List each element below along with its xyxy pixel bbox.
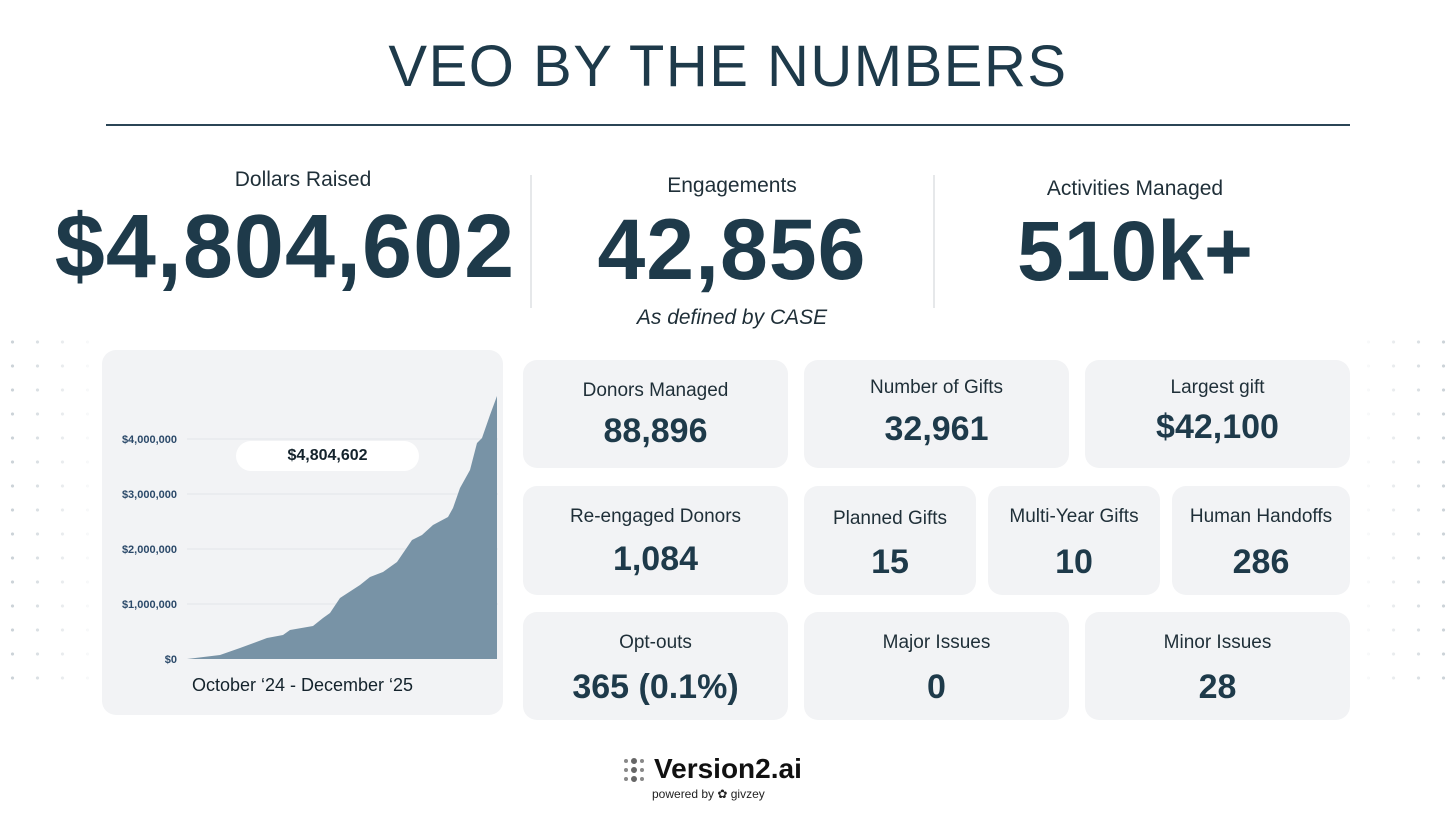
stat: activities managed: Activities Managed [1047,177,1223,200]
card: re-engaged donors: Re-engaged Donors [570,506,741,527]
icon: dot grid [624,758,644,782]
card: minor issues: 28 [1199,668,1236,706]
stat: engagements: As defined by CASE [637,306,827,329]
stat: engagements [597,174,867,329]
stat: engagements: 42,856 [597,202,867,298]
card: re-engaged donors: 1,084 [613,540,698,578]
card: planned gifts: 15 [871,543,909,581]
card: multi-year gifts [988,486,1160,595]
card: minor issues [1085,612,1350,720]
card: planned gifts: Planned Gifts [833,508,947,529]
card: planned gifts [804,486,976,595]
card: human handoffs: 286 [1233,543,1289,581]
card: donors managed [523,360,788,468]
card: number of gifts [804,360,1069,468]
panel: chart: $1,000,000 [122,599,177,611]
card: major issues [804,612,1069,720]
panel: chart [102,350,503,715]
card: opt-outs: 365 (0.1%) [572,668,739,706]
logo [624,753,802,801]
card: largest gift: Largest gift [1170,377,1264,398]
card: opt-outs: Opt-outs [619,632,692,653]
card: number of gifts: 32,961 [884,410,988,448]
callout: $4,804,602 [287,447,368,464]
panel: chart: $0 [165,654,177,666]
callout [236,441,419,471]
card: re-engaged donors [523,486,788,595]
card: major issues: 0 [927,668,946,706]
card: opt-outs [523,612,788,720]
card: human handoffs: Human Handoffs [1190,506,1332,527]
card: largest gift: $42,100 [1156,408,1279,446]
card: number of gifts: Number of Gifts [870,377,1003,398]
stat: dollars raised: Dollars Raised [235,168,371,191]
card: minor issues: Minor Issues [1164,632,1271,653]
card: donors managed: 88,896 [604,412,708,450]
card: largest gift [1085,360,1350,468]
card: donors managed: Donors Managed [583,380,728,401]
panel: chart: $3,000,000 [122,489,177,501]
logo: powered by ✿ givzey [652,787,765,801]
panel: chart: $2,000,000 [122,544,177,556]
card: major issues: Major Issues [883,632,990,653]
logo: Version2.ai [654,753,802,784]
area chart [187,396,497,659]
panel: chart: $4,000,000 [122,434,177,446]
title: VEO BY THE NUMBERS [388,34,1068,99]
stat: engagements: Engagements [667,174,797,197]
card: multi-year gifts: Multi-Year Gifts [1009,506,1139,527]
card: multi-year gifts: 10 [1055,543,1093,581]
panel: chart: October ‘24 - December ‘25 [192,675,413,695]
card: human handoffs [1172,486,1350,595]
stat: dollars raised: $4,804,602 [55,197,515,297]
stat: activities managed: 510k+ [1017,204,1253,298]
